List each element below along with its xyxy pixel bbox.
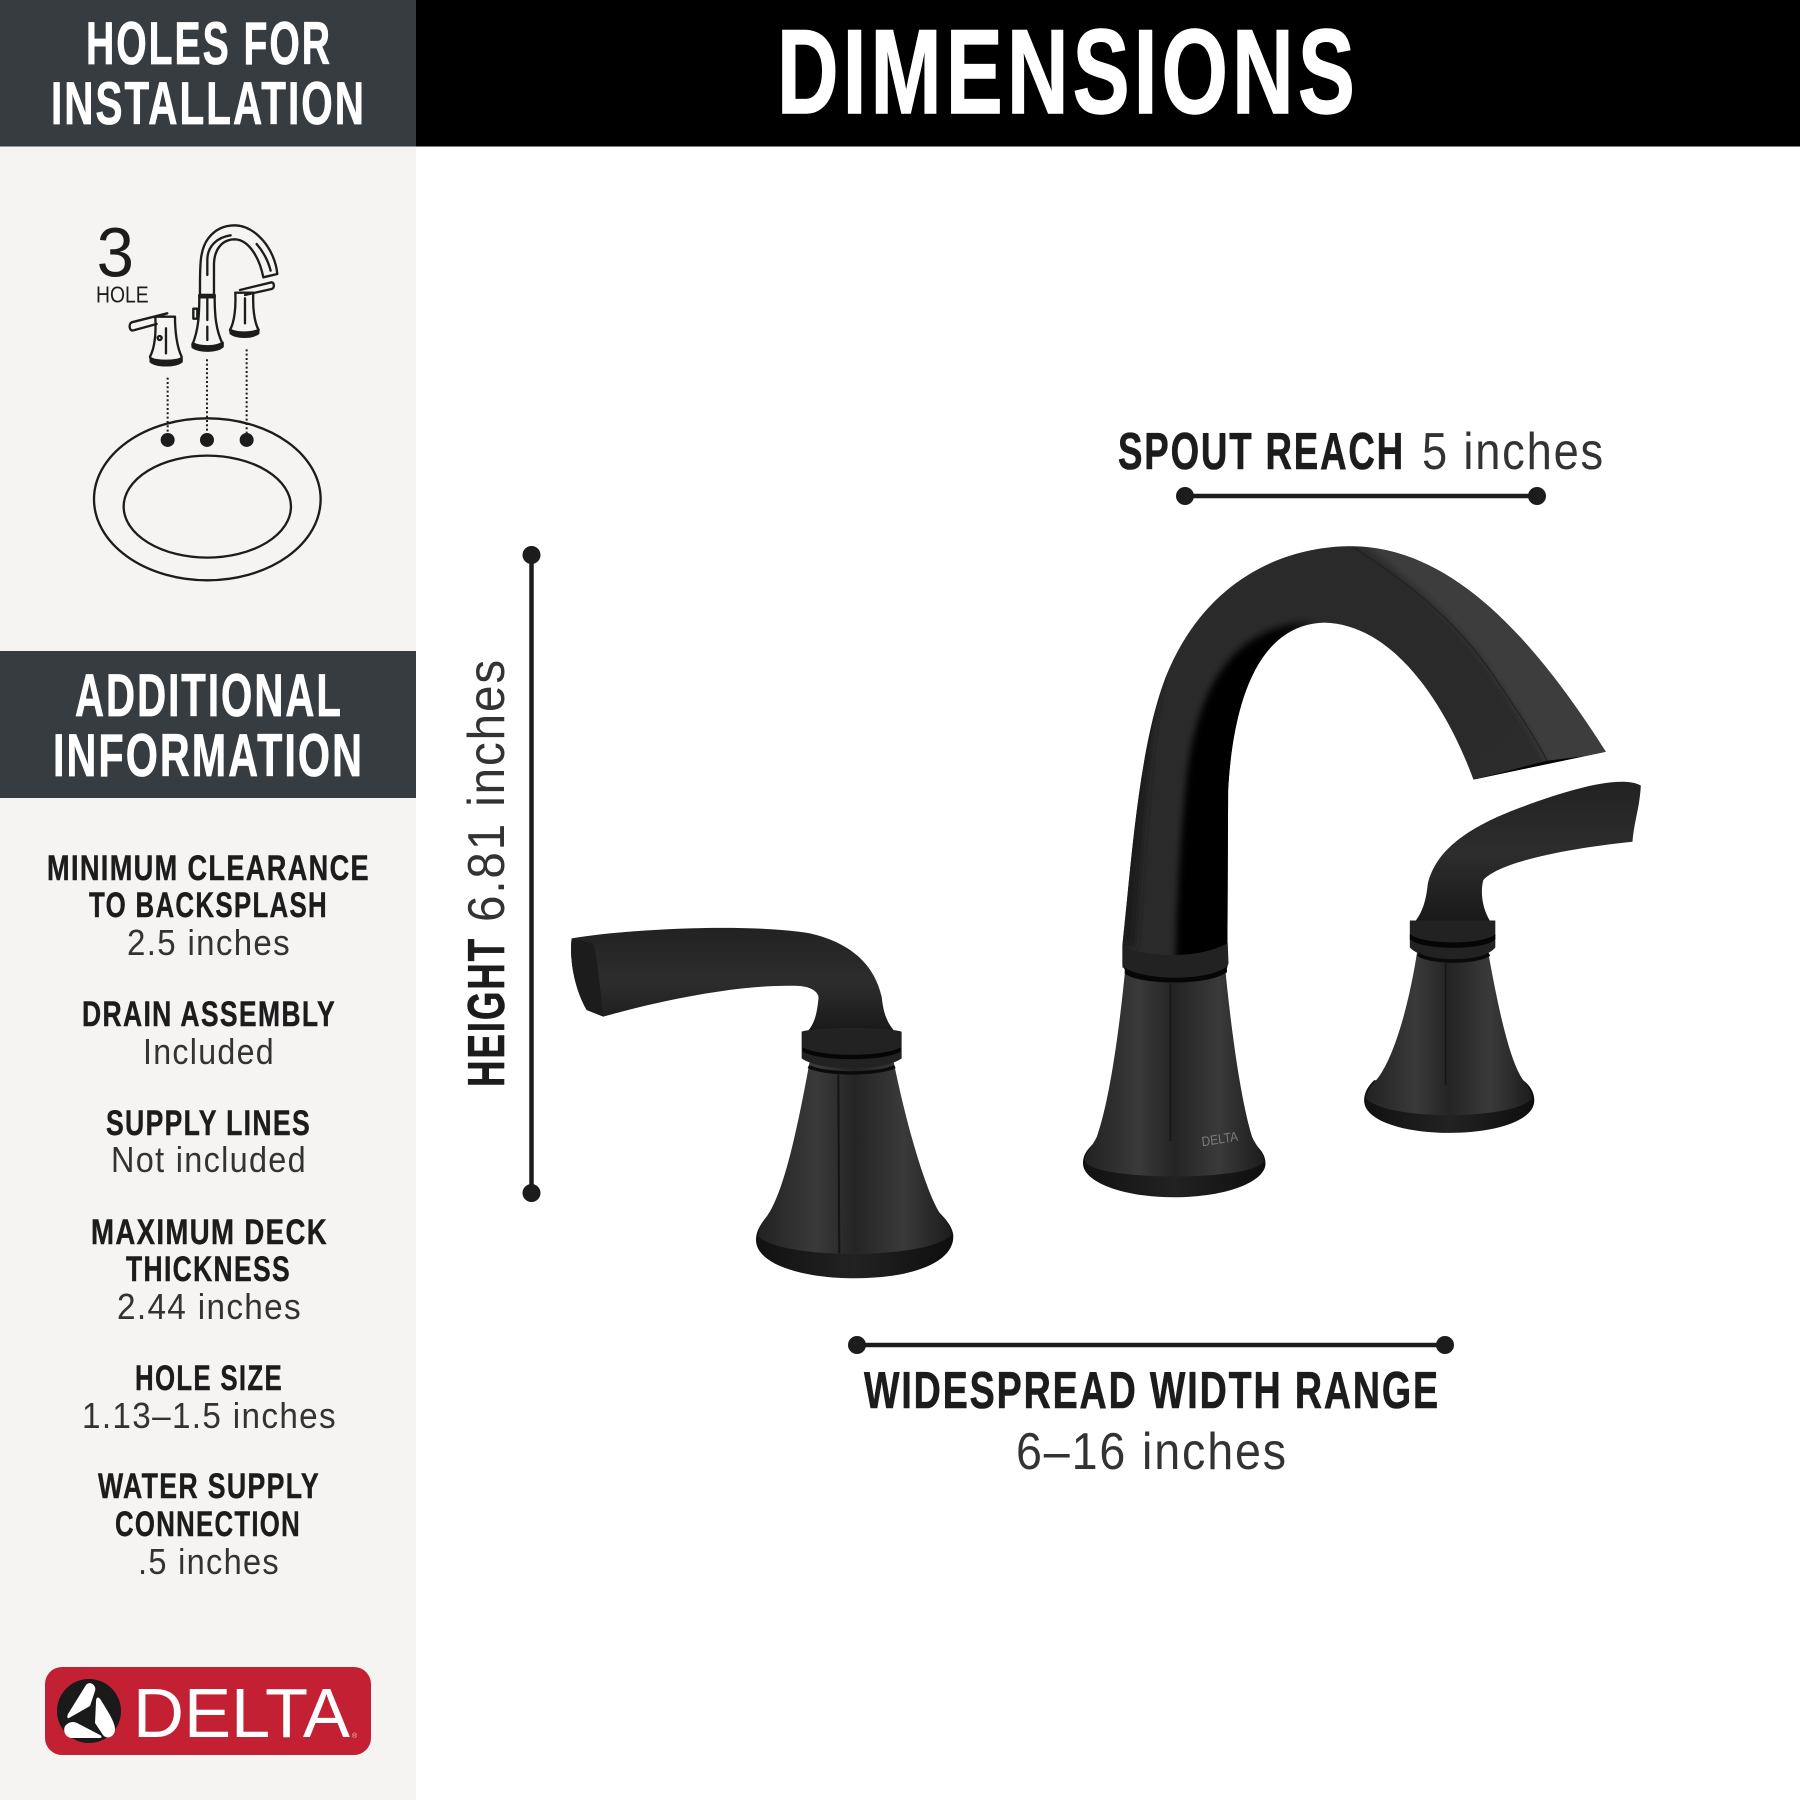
spec: supply lines: SUPPLY LINES xyxy=(106,1104,311,1143)
label: widespread width range: WIDESPREAD WIDTH RANGE xyxy=(864,1362,1440,1420)
label: height xyxy=(458,658,516,1087)
spec: minimum clearance: 2.5 inches xyxy=(127,922,291,963)
dimension line: spout reach xyxy=(1176,487,1546,505)
logo: delta: ® xyxy=(352,1732,358,1740)
label: spout reach: SPOUT REACH xyxy=(1118,423,1405,481)
header bar: dimensions: DIMENSIONS xyxy=(777,5,1359,139)
dimension line: height xyxy=(522,546,540,1202)
spec: hole size xyxy=(82,1359,337,1436)
left handle cone xyxy=(758,1060,952,1254)
left handle ridge xyxy=(835,1073,842,1253)
spec: hole size: HOLE SIZE xyxy=(135,1359,283,1398)
spec: supply lines: Not included xyxy=(111,1139,307,1180)
label: widespread width range xyxy=(864,1362,1440,1481)
right handle cone xyxy=(1366,948,1532,1115)
spec: maximum deck thickness: THICKNESS xyxy=(126,1250,291,1289)
spec: minimum clearance: MINIMUM CLEARANCE xyxy=(47,849,370,888)
illustration: right handle xyxy=(1364,782,1641,1133)
dimension line: widespread width xyxy=(848,1336,1454,1354)
spec: water supply connection xyxy=(98,1467,320,1582)
icon: 3 hole installation diagram: 3 xyxy=(97,214,134,292)
header: holes for installation xyxy=(0,0,416,146)
header bar: dimensions xyxy=(416,0,1800,146)
engraved brand: DELTA xyxy=(1201,1128,1239,1150)
arched spout with soft shading xyxy=(1110,538,1619,970)
header: additional information xyxy=(0,651,416,798)
lever end cap xyxy=(571,938,603,1017)
left handle lever xyxy=(571,928,900,1037)
spec: minimum clearance xyxy=(47,849,370,963)
panel: left sidebar xyxy=(0,0,416,1800)
collar xyxy=(1122,943,1229,979)
spec: supply lines xyxy=(106,1104,311,1180)
spec: water supply connection: CONNECTION xyxy=(115,1505,301,1544)
cone centre ridge xyxy=(1168,984,1173,1141)
right handle lever xyxy=(1410,782,1641,927)
icon: 3 hole installation diagram xyxy=(94,214,321,580)
spec: drain assembly: Included xyxy=(143,1031,275,1072)
header: additional information: INFORMATION xyxy=(53,722,364,789)
logo: delta: DELTA xyxy=(133,1674,350,1752)
spec: drain assembly xyxy=(82,995,336,1072)
base of spout xyxy=(1083,1139,1265,1197)
left handle base xyxy=(756,1213,953,1278)
header: additional information: ADDITIONAL xyxy=(75,662,343,729)
header: holes for installation: HOLES FOR xyxy=(86,10,332,77)
logo: delta xyxy=(45,1667,371,1755)
icon: 3 hole installation diagram: HOLE xyxy=(96,282,149,308)
label: height: 6.81 inches xyxy=(458,658,516,922)
spec: drain assembly: DRAIN ASSEMBLY xyxy=(82,995,336,1034)
spec: maximum deck thickness: MAXIMUM DECK xyxy=(91,1213,328,1252)
right handle rings xyxy=(1410,920,1495,959)
illustration: faucet spout xyxy=(1083,538,1619,1197)
label: widespread width range: 6–16 inches xyxy=(1016,1423,1288,1481)
spec: hole size: 1.13–1.5 inches xyxy=(82,1395,337,1436)
spec: maximum deck thickness: 2.44 inches xyxy=(117,1286,302,1327)
left handle rings xyxy=(802,1028,902,1068)
label: height: HEIGHT xyxy=(458,937,516,1087)
spec: water supply connection: WATER SUPPLY xyxy=(98,1467,320,1506)
cone body xyxy=(1085,966,1264,1176)
label: spout reach: 5 inches xyxy=(1422,423,1605,481)
illustration: left handle xyxy=(571,928,953,1278)
spec: minimum clearance: TO BACKSPLASH xyxy=(89,886,328,925)
spec: maximum deck thickness xyxy=(91,1213,328,1327)
spec: water supply connection: .5 inches xyxy=(138,1541,280,1582)
right handle ridge xyxy=(1444,963,1448,1085)
header: holes for installation: INSTALLATION xyxy=(51,70,366,137)
right handle base xyxy=(1364,1080,1534,1133)
